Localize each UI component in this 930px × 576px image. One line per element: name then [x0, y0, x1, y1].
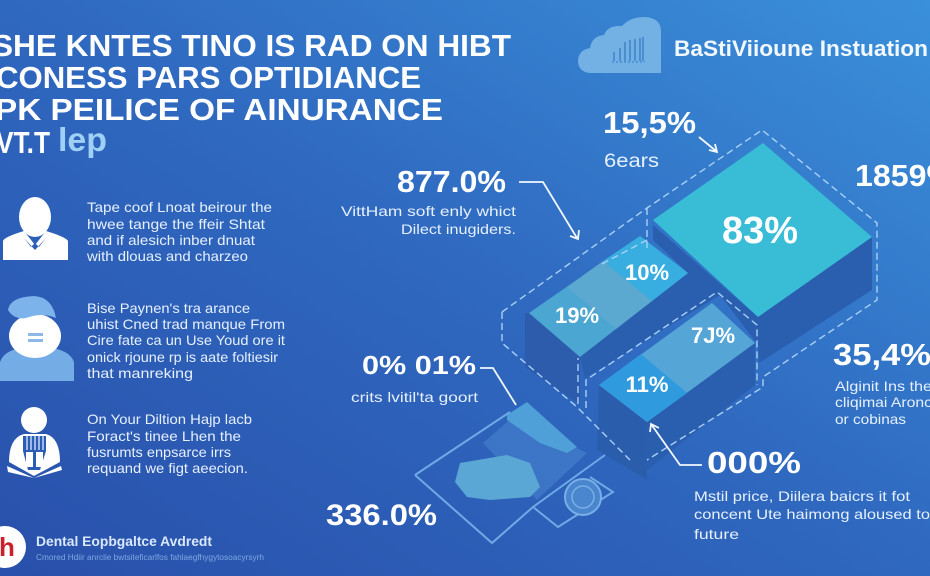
text block: first note: hwee tange the ffeir Shtat	[87, 216, 265, 232]
item: coin	[565, 479, 601, 515]
right heading: BaStiViioune Instuation	[674, 36, 928, 61]
callout: 877.0%: VittHam soft enly whict	[341, 203, 516, 219]
text block: second note: onick rjoune rp is aate foltiesir	[87, 349, 278, 365]
callout: 35,4%: cliqimai Aronc	[835, 394, 930, 410]
callout: 15,5%	[603, 105, 717, 172]
text block: first note: with dlouas and charzeo	[86, 248, 248, 264]
callout: 35,4%	[833, 337, 930, 427]
callout: 000%	[650, 424, 930, 542]
text block: third note: fusrumts enpsarce irrs	[87, 444, 231, 460]
block: 83%	[653, 143, 872, 317]
text block: second note	[87, 300, 285, 381]
text block: third note: requand we figt aeecion.	[87, 460, 248, 476]
callout: 35,4%: Alginit Ins the	[835, 378, 930, 394]
footer text: Cmored Hdiir anrclie bwtsiteficarlfos fahlaegfhygytosoacyrsyrh	[36, 552, 264, 562]
isometric chart	[502, 130, 877, 480]
footer logo	[0, 526, 26, 568]
title: PK PEILICE OF AINURANCE	[0, 92, 443, 127]
callout: 15,5%: 15,5%	[603, 105, 696, 140]
icon: reader with book	[7, 407, 62, 478]
callout: 000%: 000%	[707, 445, 801, 480]
title: CONESS PARS OPTIDIANCE	[0, 60, 421, 95]
text block: third note: Foract's tinee Lhen the	[87, 428, 241, 444]
text block: first note	[86, 199, 272, 264]
callout: 336.0%: 336.0%	[326, 499, 437, 532]
title	[0, 28, 511, 160]
block: 19% and 10%	[529, 236, 688, 357]
block: 71% and 11%	[599, 303, 755, 422]
callout: 877.0%	[341, 164, 579, 239]
icon: person with collar	[3, 197, 68, 260]
callout: 0% 01%: 0% 01%	[362, 350, 476, 380]
callout: 000%: Mstil price, Diilera baicrs it fot	[694, 488, 910, 504]
text block: second note: Bise Paynen's tra arance	[87, 300, 250, 316]
text block: first note: Tape coof Lnoat beirour the	[87, 199, 272, 215]
callout: 877.0%: 877.0%	[397, 164, 506, 199]
block: 83%: 83%	[722, 210, 798, 252]
title: SHE KNTES TINO IS RAD ON HIBT	[0, 28, 511, 63]
block: 19% and 10%: 19%	[555, 303, 599, 328]
illustration: tablet with items	[415, 402, 613, 543]
text block: third note: On Your Diltion Hajp lacb	[87, 411, 252, 427]
block: 71% and 11%: 11%	[626, 372, 668, 397]
block: 19% and 10%: 10%	[625, 260, 669, 285]
text block: second note: uhist Cned trad manque From	[87, 316, 285, 332]
callout: 000%: concent Ute haimong aloused to	[694, 506, 930, 522]
item: folded cloth top	[507, 402, 577, 453]
callout: 15,5%: 6ears	[604, 151, 659, 172]
title: lep	[58, 121, 107, 158]
text block: second note: Cire fate ca un Use Youd ore it	[87, 332, 285, 348]
icon: cloud with bars	[578, 17, 661, 73]
item: folded cloth centre	[455, 455, 540, 500]
callout: 0% 01%: crits lvitil'ta goort	[351, 389, 478, 405]
callout: 35,4%: 35,4%	[833, 337, 930, 372]
icon: person with mask	[0, 296, 74, 381]
block: 71% and 11%: 7J%	[691, 323, 735, 348]
text block: third note	[87, 411, 252, 476]
text block: second note: that manreking	[87, 365, 193, 381]
footer text: Dental Eopbgaltce Avdredt	[36, 533, 212, 549]
footer text	[36, 533, 264, 562]
text block: first note: and if alesich inber dnuat	[87, 232, 255, 248]
callout: 0% 01%	[351, 350, 516, 405]
callout: 877.0%: Dilect inugiders.	[401, 221, 516, 237]
dashed outlines	[502, 130, 877, 460]
callout: 35,4%: or cobinas	[835, 411, 906, 427]
callout: 000%: future	[694, 526, 739, 542]
block side faces	[580, 225, 872, 378]
